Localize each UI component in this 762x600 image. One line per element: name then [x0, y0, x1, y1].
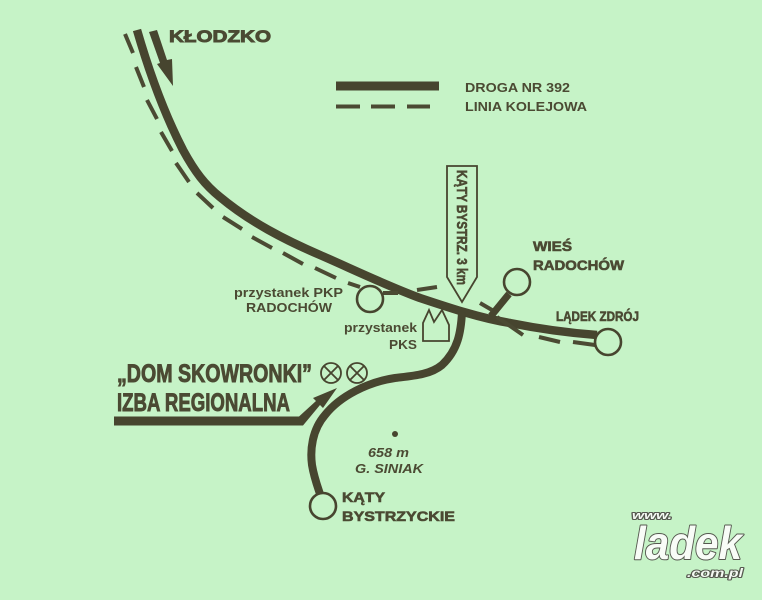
place: Kąty Bystrzyckie circle — [310, 493, 336, 519]
logo: www.ladek.com.pl: ladek — [634, 517, 744, 569]
label: przystanek PKP Radochów: przystanek PKP — [234, 285, 343, 300]
label: Wieś Radochów: WIEŚ — [533, 237, 572, 254]
label: przystanek PKP Radochów: RADOCHÓW — [246, 300, 333, 315]
legend: railway sample — [336, 104, 430, 108]
signpost: Kąty Bystrz. 3 km: KĄTY BYSTRZ. 3 km — [453, 170, 470, 285]
arrow: direction from Kłodzko — [149, 30, 173, 86]
road: spur to Wieś Radochów — [491, 294, 509, 316]
legend: road label: DROGA NR 392 — [465, 80, 570, 95]
road: branch to Kąty Bystrzyckie — [311, 312, 462, 494]
logo: www.ladek.com.pl: .com.pl — [687, 566, 744, 580]
icon: PKS building — [423, 310, 449, 341]
label: przystanek PKS: PKS — [389, 337, 417, 352]
place: Wieś Radochów circle — [504, 269, 530, 295]
legend: road sample — [336, 82, 439, 90]
logo: www.ladek.com.pl: www. — [632, 510, 672, 522]
arrow: pointer to Dom Skowronki — [114, 388, 337, 426]
icon: crossed circle markers — [321, 363, 367, 383]
legend: railway label: LINIA KOLEJOWA — [465, 99, 588, 114]
legend — [336, 80, 588, 114]
road: main route 392 — [137, 30, 597, 335]
signpost: Kąty Bystrz. 3 km — [447, 166, 477, 302]
logo: www.ladek.com.pl — [632, 510, 744, 580]
label: Kłodzko: KŁODZKO — [169, 27, 271, 46]
label: Kąty Bystrzyckie: KĄTY — [342, 489, 386, 505]
label: Kąty Bystrzyckie: BYSTRZYCKIE — [342, 508, 455, 524]
map: road network — [125, 30, 621, 519]
label: 658 m G. Siniak: 658 m — [368, 445, 409, 460]
icon: summit dot — [392, 431, 398, 437]
label: przystanek PKS: przystanek — [344, 320, 418, 335]
stop: przystanek PKP circle — [357, 286, 383, 312]
heading: Izba Regionalna: IZBA REGIONALNA — [117, 389, 290, 417]
railway line — [125, 34, 595, 345]
label: Lądek Zdrój: LĄDEK ZDRÓJ — [556, 307, 639, 324]
label: 658 m G. Siniak: G. SINIAK — [355, 461, 425, 476]
heading: Dom Skowronki: „DOM SKOWRONKI” — [117, 360, 312, 388]
place: Lądek Zdrój circle — [595, 329, 621, 355]
label: Wieś Radochów: RADOCHÓW — [533, 256, 625, 273]
